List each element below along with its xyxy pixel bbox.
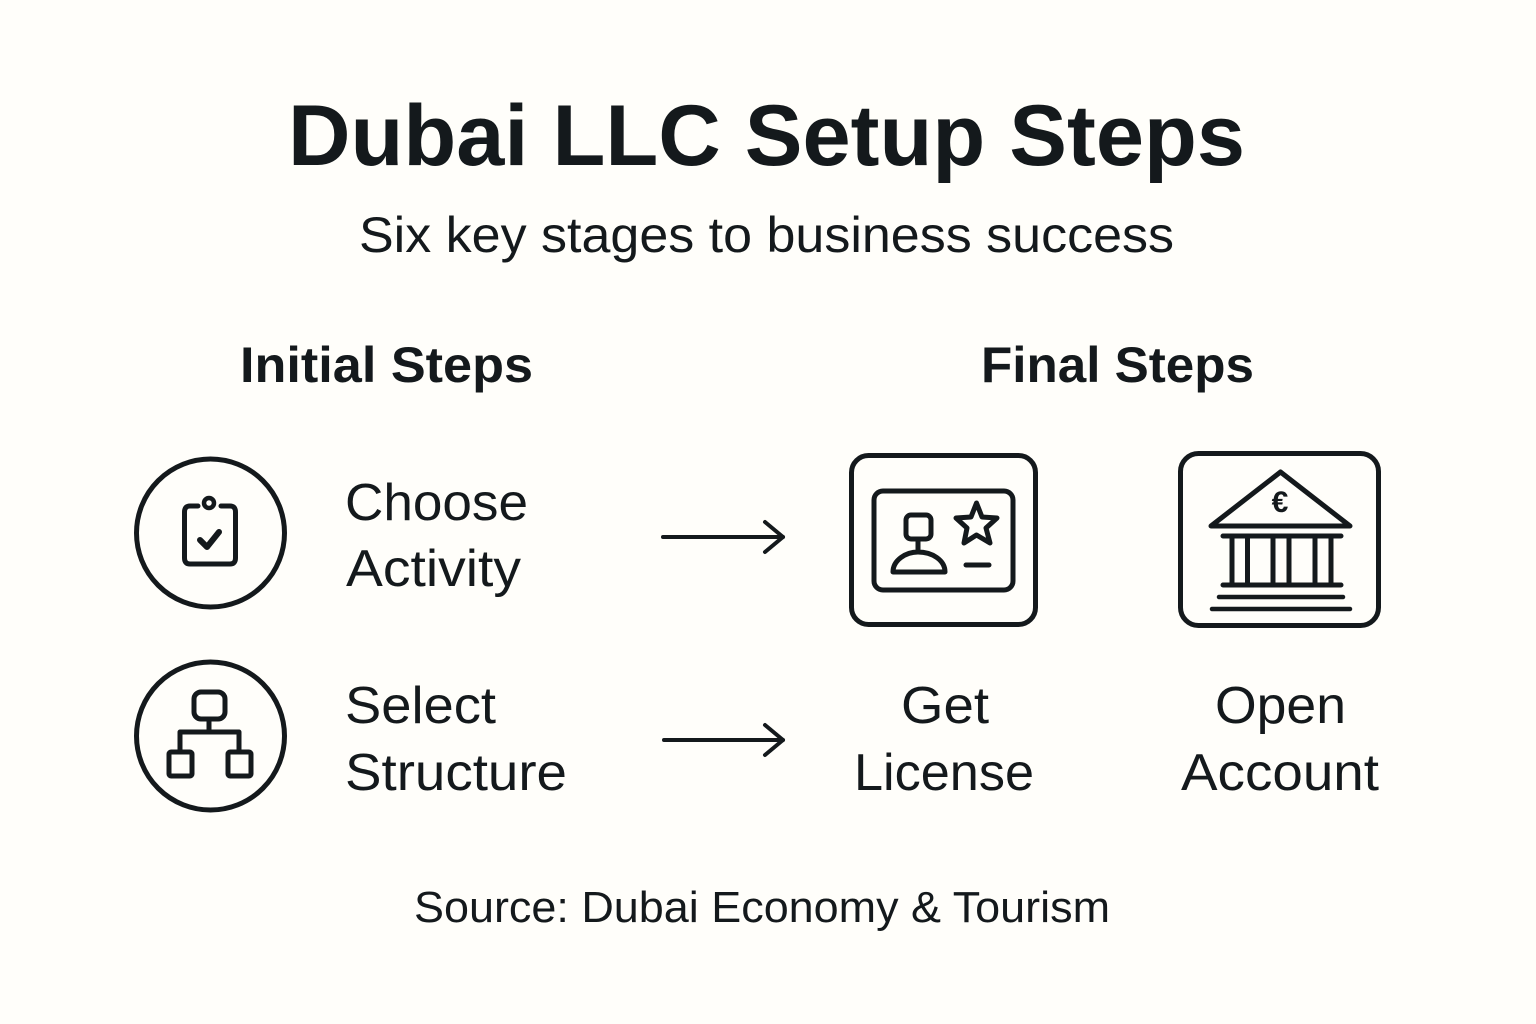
label: select structure: Select — [345, 677, 497, 735]
subtitle: Six key stages to business success — [359, 207, 1174, 263]
label: open account: Open — [1215, 677, 1346, 735]
label: open account: Account — [1181, 744, 1380, 802]
label: choose activity: Choose — [345, 474, 528, 532]
heading: initial steps: Initial Steps — [240, 337, 533, 393]
arrow: choose activity to license — [663, 522, 783, 552]
icon: license card — [852, 456, 1036, 624]
icon: clipboard with check in circle — [136, 459, 284, 607]
heading: final steps: Final Steps — [981, 337, 1254, 393]
icon: euro sign on bank: € — [1272, 486, 1289, 519]
icon: bank building — [1180, 454, 1378, 626]
arrow: select structure to account — [664, 725, 783, 755]
title: Dubai LLC Setup Steps — [288, 88, 1245, 184]
label: get license: Get — [901, 677, 990, 735]
label: select structure: Structure — [345, 744, 567, 802]
icon: org structure in circle — [136, 662, 284, 810]
label: choose activity — [345, 474, 528, 598]
label: get license: License — [854, 744, 1034, 802]
label: select structure — [345, 677, 567, 802]
label: choose activity: Activity — [346, 540, 521, 598]
label: open account — [1181, 677, 1380, 802]
label: get license — [854, 677, 1034, 802]
source note: Source: Dubai Economy & Tourism — [414, 883, 1110, 932]
